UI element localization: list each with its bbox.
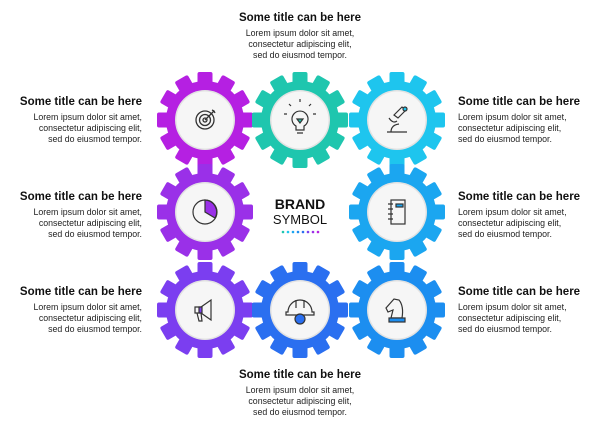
text: left 2 [20, 191, 142, 239]
gear: notebook [349, 164, 445, 260]
text: left 2: Lorem ipsum dolor sit amet, [33, 207, 142, 217]
gear: helmet [252, 262, 348, 358]
text: left 3 [20, 286, 142, 334]
gear: chess knight [349, 262, 445, 358]
text: left 1: Lorem ipsum dolor sit amet, [33, 112, 142, 122]
text: right 3: sed do eiusmod tempor. [458, 324, 552, 334]
text: top: consectetur adipiscing elit, [248, 39, 352, 49]
brand symbol [273, 196, 327, 233]
text: left 3: Lorem ipsum dolor sit amet, [33, 302, 142, 312]
text: right 2: sed do eiusmod tempor. [458, 229, 552, 239]
text: right 2: Some title can be here [458, 191, 580, 203]
text: top [239, 12, 361, 60]
text: right 1: Some title can be here [458, 96, 580, 108]
text: left 1: consectetur adipiscing elit, [39, 123, 142, 133]
text: bottom: Lorem ipsum dolor sit amet, [246, 385, 354, 395]
text: right 2 [458, 191, 580, 239]
text: left 1: sed do eiusmod tempor. [48, 134, 142, 144]
text: bottom: consectetur adipiscing elit, [248, 396, 352, 406]
text: right 1: Lorem ipsum dolor sit amet, [458, 112, 567, 122]
text: top: Some title can be here [239, 12, 361, 24]
text: right 1 [458, 96, 580, 144]
text: right 3: Lorem ipsum dolor sit amet, [458, 302, 567, 312]
text: right 2: Lorem ipsum dolor sit amet, [458, 207, 567, 217]
text: left 2: consectetur adipiscing elit, [39, 218, 142, 228]
brand symbol: BRAND [275, 196, 325, 212]
text: bottom: Some title can be here [239, 369, 361, 381]
text: left 2: Some title can be here [20, 191, 142, 203]
text: left 1: Some title can be here [20, 96, 142, 108]
text: right 1: consectetur adipiscing elit, [458, 123, 561, 133]
text: left 3: sed do eiusmod tempor. [48, 324, 142, 334]
text: right 2: consectetur adipiscing elit, [458, 218, 561, 228]
text: right 3: Some title can be here [458, 286, 580, 298]
text: top: sed do eiusmod tempor. [253, 50, 347, 60]
text: right 3 [458, 286, 580, 334]
brand symbol: SYMBOL [273, 212, 327, 227]
gear: microscope [349, 72, 445, 168]
text: top: Lorem ipsum dolor sit amet, [246, 28, 354, 38]
text: right 1: sed do eiusmod tempor. [458, 134, 552, 144]
gear: megaphone [157, 262, 253, 358]
gear: timer [157, 164, 253, 260]
gear: target [157, 72, 253, 168]
text: bottom: sed do eiusmod tempor. [253, 407, 347, 417]
text: left 3: consectetur adipiscing elit, [39, 313, 142, 323]
text: left 2: sed do eiusmod tempor. [48, 229, 142, 239]
text: bottom [239, 369, 361, 417]
gear: bulb [252, 72, 348, 168]
text: left 1 [20, 96, 142, 144]
text: right 3: consectetur adipiscing elit, [458, 313, 561, 323]
text: left 3: Some title can be here [20, 286, 142, 298]
